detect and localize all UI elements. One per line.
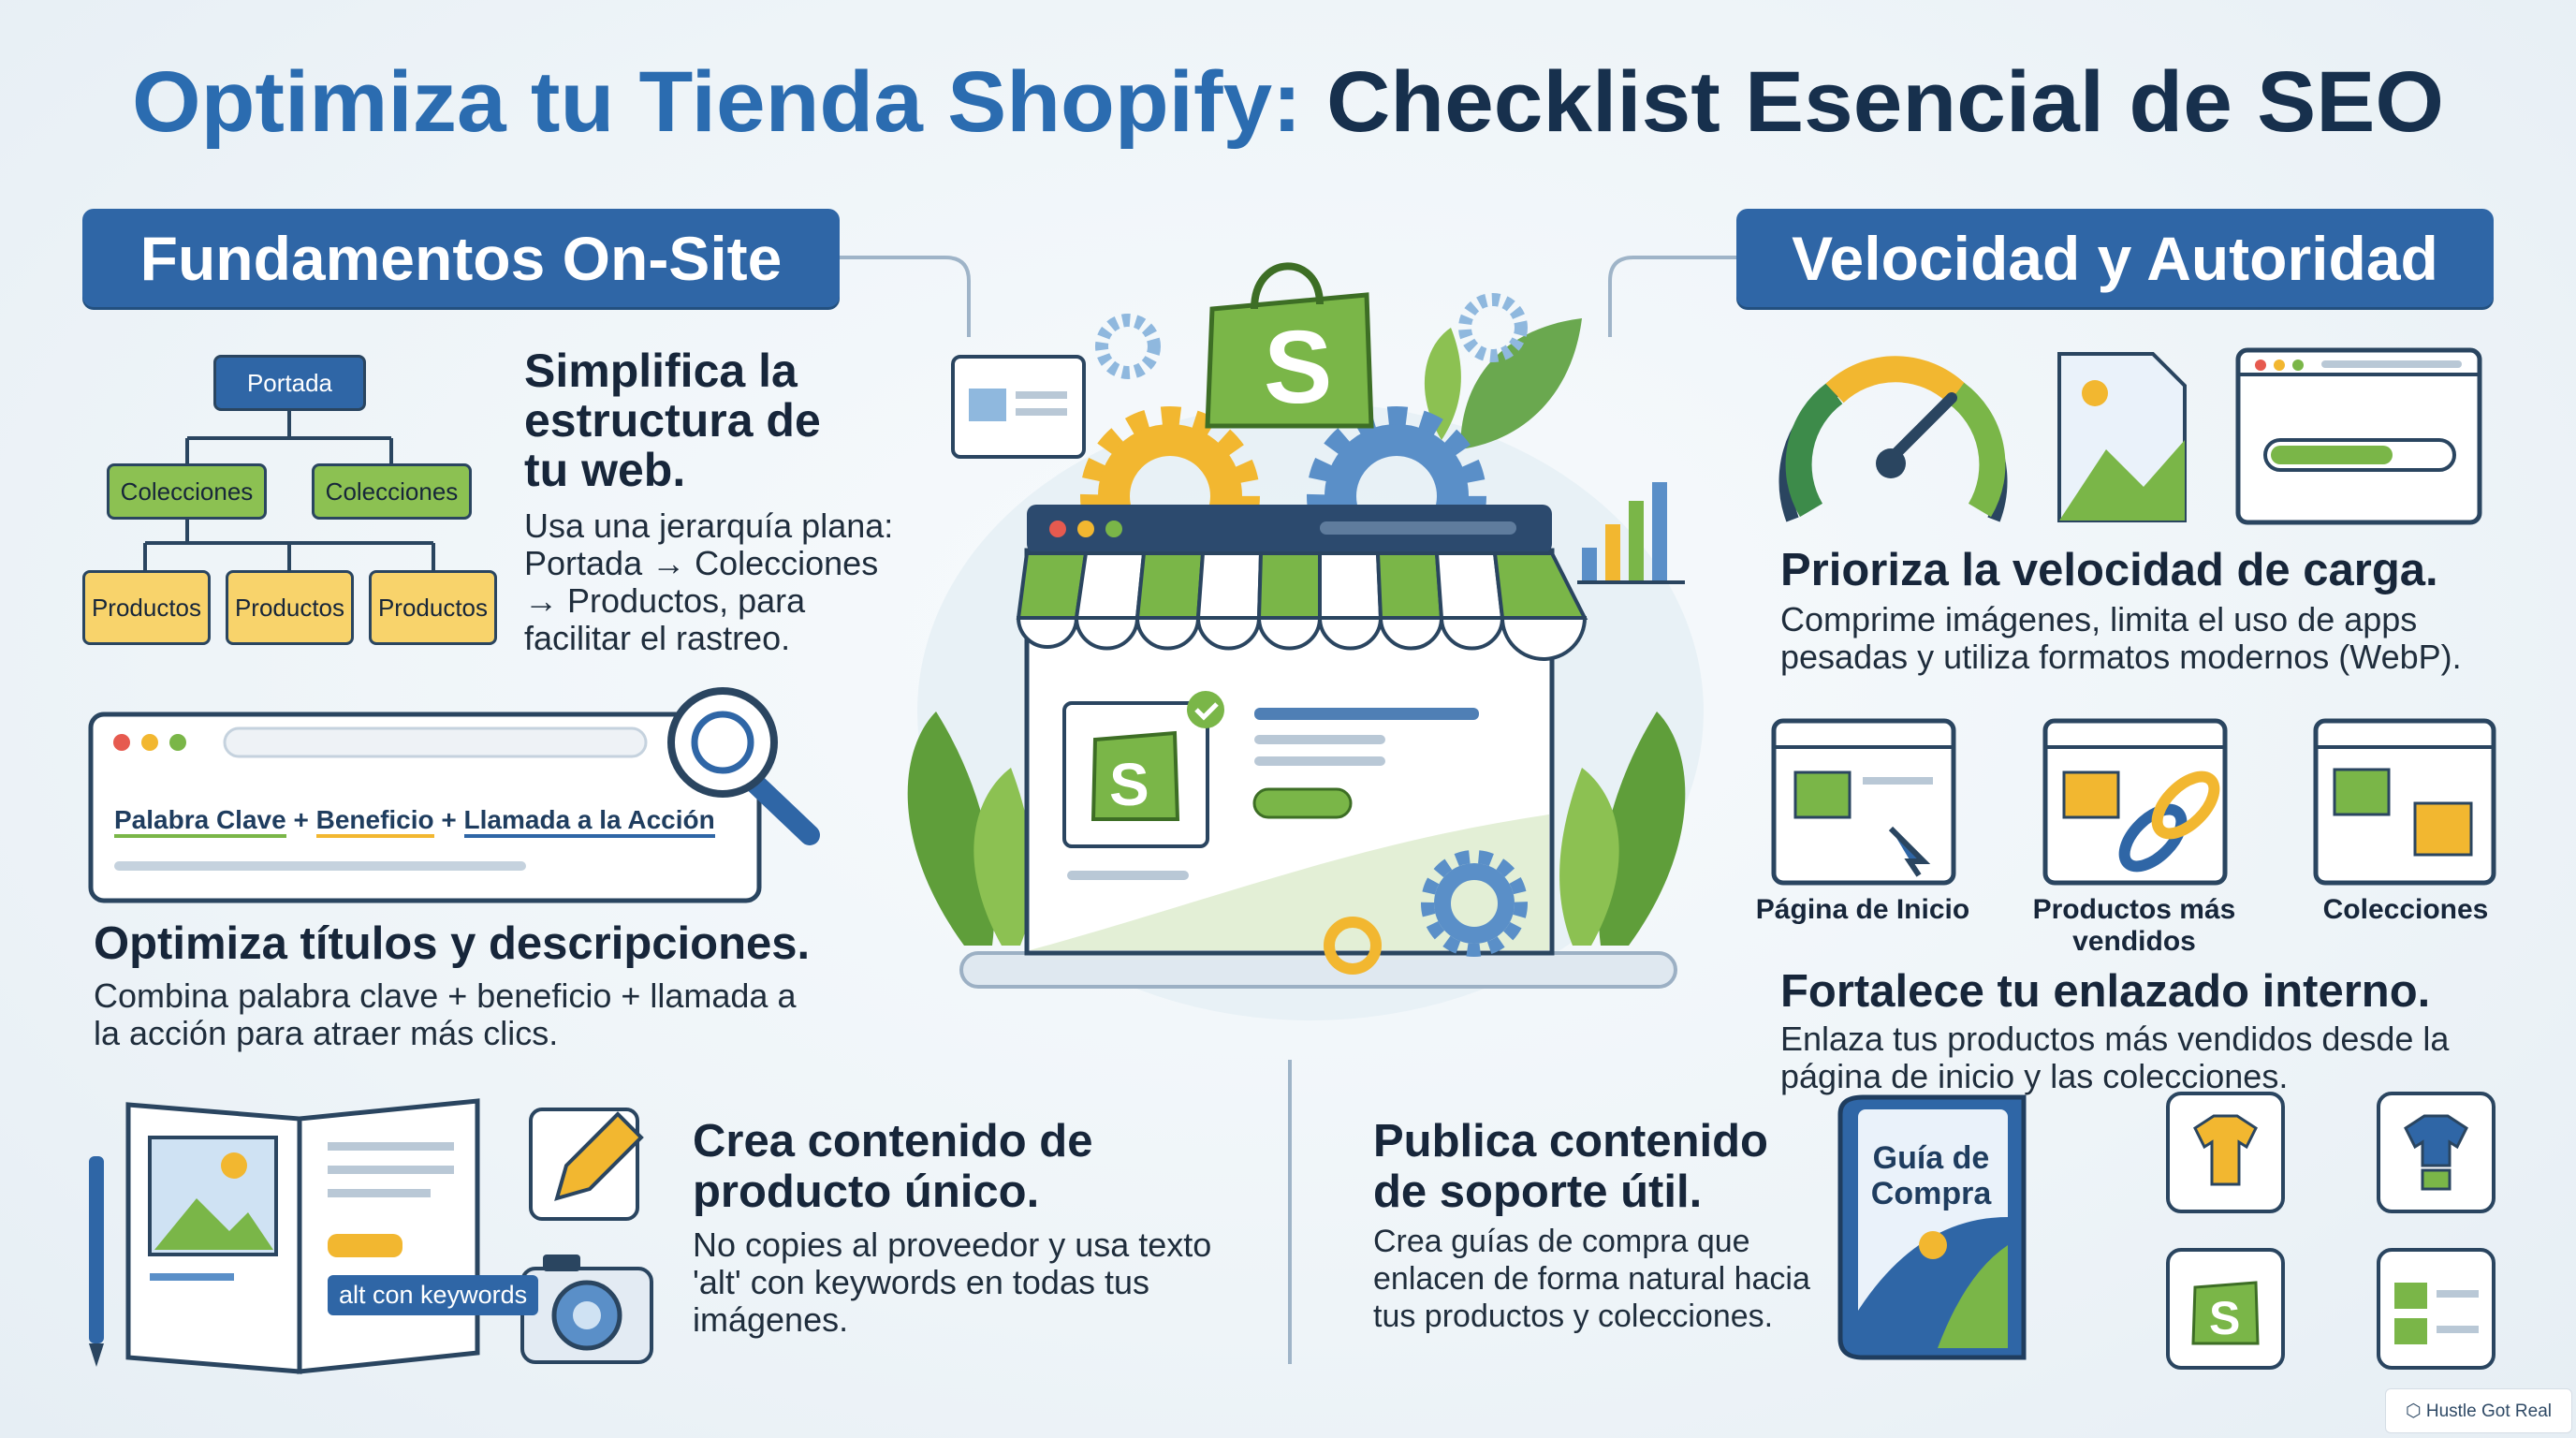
icon tiles: S — [2209, 1292, 2240, 1344]
icon tiles — [2168, 1093, 2494, 1368]
box: Portada: Portada — [247, 369, 332, 397]
camera icon — [522, 1255, 651, 1362]
label: Colecciones: Colecciones — [2323, 894, 2488, 925]
text: Simplifica body: Usa una jerarquía plana: Portada → Colecciones → Productos, para facilitar el rastreo. — [524, 506, 893, 657]
org chart connectors — [145, 411, 433, 570]
header: Velocidad y Autoridad — [1736, 209, 2494, 307]
image icon — [2059, 354, 2185, 521]
center illustration: storefront: S — [1264, 310, 1332, 425]
speedometer icon — [1785, 369, 2001, 520]
guia de compra book: Compra — [1871, 1176, 1992, 1211]
box: Portada — [213, 355, 366, 411]
guia de compra book — [1840, 1097, 2024, 1357]
text: Crea body: No copies al proveedor y usa texto 'alt' con keywords en todas tus imágenes. — [693, 1225, 1211, 1339]
search bar graphic — [91, 691, 810, 901]
heading: Simplifica: Simplifica la estructura de tu web. — [524, 345, 821, 496]
header: Fundamentos On-Site — [82, 209, 840, 307]
box: Productos 2 — [226, 570, 354, 645]
box: Colecciones 2 — [312, 463, 472, 520]
guia de compra book: Guía de — [1873, 1140, 1989, 1176]
header: Velocidad y Autoridad: Velocidad y Autoridad — [1792, 223, 2438, 292]
label: Página de Inicio: Página de Inicio — [1756, 894, 1969, 925]
box: Productos 2: Productos — [235, 594, 344, 622]
watermark: ⬡ Hustle Got Real — [2406, 1401, 2552, 1421]
box: Productos 1: Productos — [92, 594, 201, 622]
connector lines — [840, 257, 1736, 1364]
box: Productos 1 — [82, 570, 211, 645]
title: Optimiza tu Tienda Shopify: Checklist Esencial de SEO — [132, 54, 2444, 150]
center illustration: storefront — [908, 266, 1704, 1020]
pencil icon — [531, 1109, 641, 1219]
header: Fundamentos On-Site: Fundamentos On-Site — [140, 223, 782, 292]
heading: Optimiza títulos: Optimiza títulos y descripciones. — [94, 918, 810, 969]
box: Productos 3: Productos — [378, 594, 488, 622]
linking browsers — [1774, 721, 2494, 883]
alt tag label: alt con keywords — [339, 1281, 527, 1309]
text: Fortalece body: Enlaza tus productos más vendidos desde la página de inicio y las colecciones. — [1780, 1020, 2449, 1095]
text: Optimiza body: Combina palabra clave + beneficio + llamada a la acción para atraer más clics. — [94, 976, 796, 1052]
box: Productos 3 — [369, 570, 497, 645]
alt tag label — [328, 1275, 538, 1315]
watermark — [2385, 1388, 2572, 1433]
text: Publica body: Crea guías de compra que enlacen de forma natural hacia tus productos y colecciones. — [1373, 1224, 1810, 1334]
heading: Crea contenido: Crea contenido de producto único. — [693, 1116, 1092, 1217]
heading: Prioriza: Prioriza la velocidad de carga. — [1780, 545, 2438, 595]
box: Colecciones 1: Colecciones — [121, 477, 253, 506]
text: Prioriza body: Comprime imágenes, limita el uso de apps pesadas y utiliza formatos modernos (WebP). — [1780, 600, 2462, 676]
org chart — [82, 355, 497, 645]
search formula text: Palabra Clave + Beneficio + Llamada a la Acción — [114, 805, 715, 834]
progress browser icon — [2238, 350, 2480, 522]
box: Colecciones 2: Colecciones — [326, 477, 458, 506]
heading: Fortalece: Fortalece tu enlazado interno. — [1780, 966, 2430, 1017]
heading: Publica contenido: Publica contenido de soporte útil. — [1373, 1116, 1768, 1217]
label: Productos más vendidos: Productos más vendidos — [2033, 894, 2235, 957]
box: Colecciones 1 — [107, 463, 267, 520]
book illustration — [89, 1101, 477, 1372]
center illustration: storefront: S — [1109, 751, 1149, 818]
